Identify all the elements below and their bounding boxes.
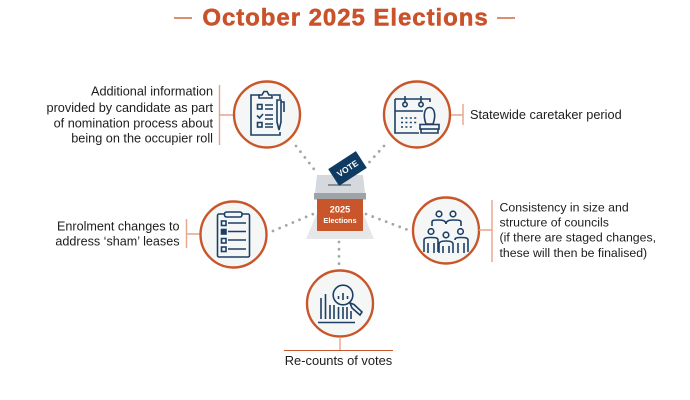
text block: (if there are staged changes, <box>500 230 656 244</box>
icon: clipboard checklist <box>251 92 284 135</box>
icon: clipboard form <box>218 212 250 257</box>
text block: being on the occupier roll <box>71 132 213 146</box>
text block: Re-counts of votes <box>285 353 392 368</box>
text block <box>47 84 213 146</box>
ballot slot <box>328 184 351 186</box>
panel: council structure <box>413 198 656 264</box>
text block: Additional information <box>91 84 213 98</box>
text block: address ‘sham’ leases <box>55 234 180 248</box>
icon: calendar and stamp <box>395 96 439 133</box>
box lid <box>315 175 365 193</box>
text block: these will then be finalised) <box>500 246 647 260</box>
box front label <box>317 199 363 231</box>
box front label: 2025 <box>330 204 350 214</box>
text block: Consistency in size and <box>500 200 629 214</box>
lid rim <box>314 193 366 200</box>
panel: re-counts <box>284 270 393 368</box>
text block: Statewide caretaker period <box>470 107 622 122</box>
text block <box>500 200 656 260</box>
icon: group of people <box>424 211 468 253</box>
text block: Enrolment changes to <box>57 220 180 234</box>
box front label: Elections <box>323 216 357 225</box>
text block: of nomination process about <box>54 116 213 130</box>
text block: structure of councils <box>500 216 609 230</box>
dotted connectors <box>273 146 408 264</box>
panel: occupier roll <box>47 82 300 148</box>
ballot box <box>306 151 374 239</box>
panel: sham leases <box>55 202 266 268</box>
vote card: VOTE <box>335 158 360 179</box>
box base <box>306 213 374 239</box>
title: October 2025 Elections <box>202 4 489 32</box>
panel: caretaker period <box>384 82 622 148</box>
icon: bar chart with magnifier <box>318 285 362 322</box>
text block <box>55 220 180 248</box>
text block: provided by candidate as part <box>47 101 213 115</box>
